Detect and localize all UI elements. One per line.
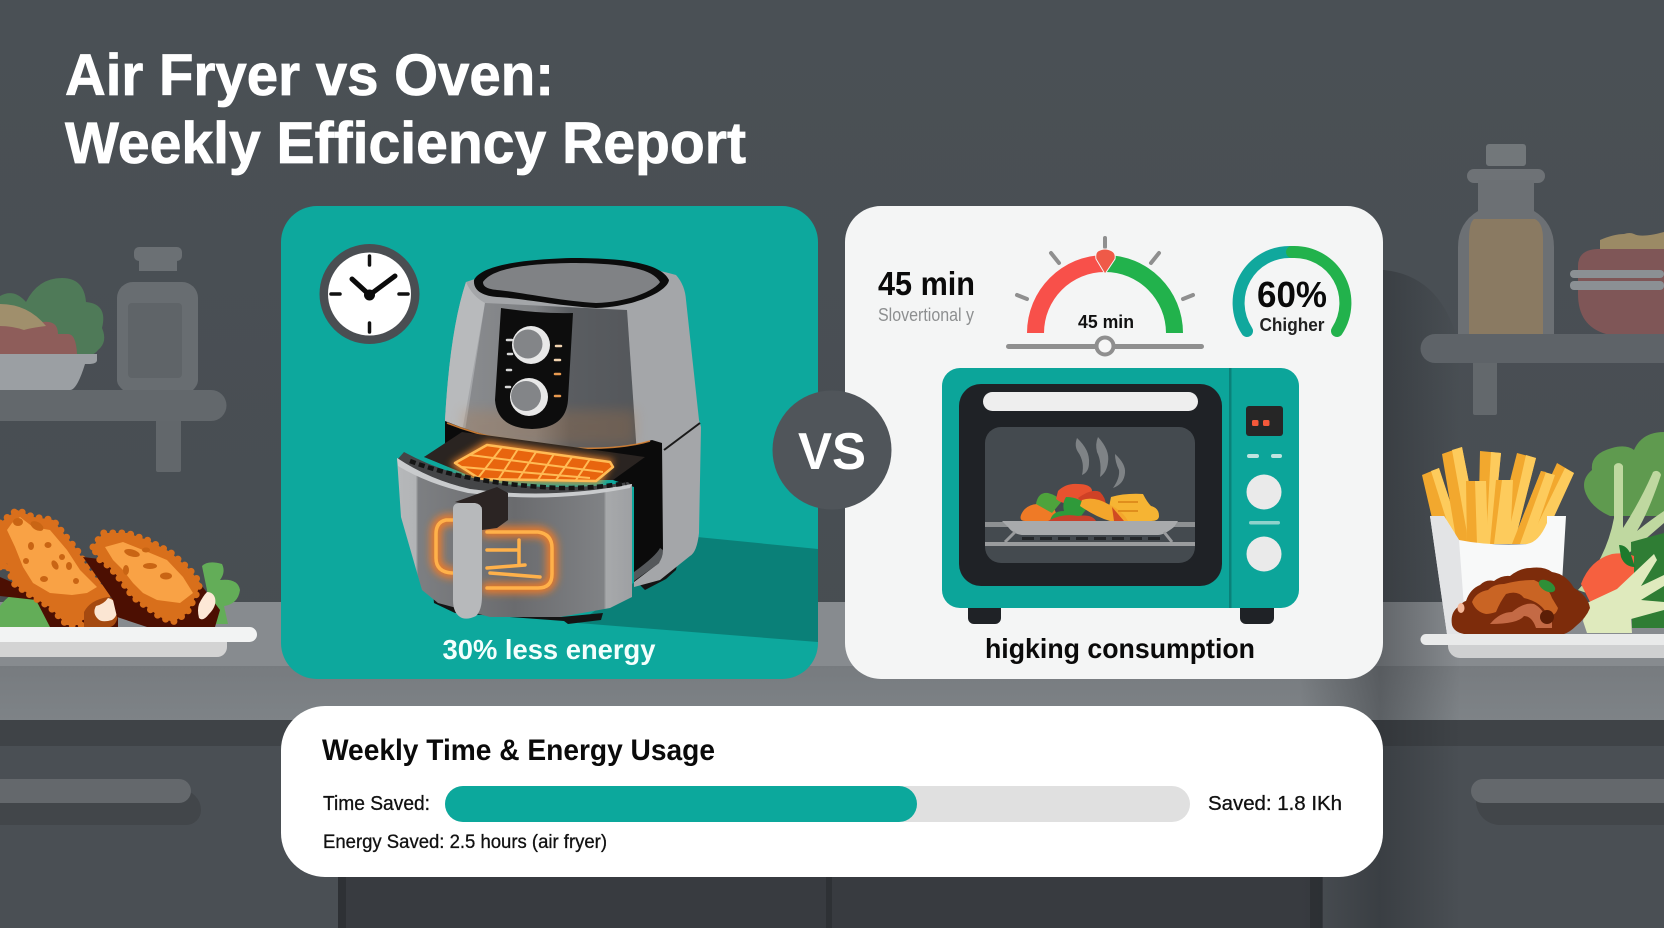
bottle xyxy=(1458,144,1554,334)
icon: oven xyxy=(942,368,1299,624)
fryer feet xyxy=(433,593,603,624)
dark greens xyxy=(1631,533,1664,628)
broccoli xyxy=(1578,432,1664,597)
basket rim holes xyxy=(410,461,626,488)
icon: clock xyxy=(320,244,420,344)
basket rim xyxy=(397,452,632,495)
glowing icon on basket xyxy=(436,520,552,588)
heading: Weekly Time & Energy Usage xyxy=(322,734,715,767)
plate xyxy=(1420,634,1664,658)
energy saved: Energy Saved: 2.5 hours (air fryer) xyxy=(323,832,607,853)
chicken piece 2 xyxy=(83,533,220,627)
right plate with fries, meat and vegetables xyxy=(1420,432,1664,658)
panel: oven xyxy=(845,206,1383,679)
title xyxy=(65,43,746,176)
rack and tray xyxy=(985,521,1195,546)
ring: 60% higher xyxy=(1239,252,1345,335)
stat: 45 min xyxy=(878,265,975,325)
glowing grid xyxy=(450,441,614,484)
title: Weekly Efficiency Report xyxy=(65,111,746,176)
left shelf with bowl and jar xyxy=(0,247,226,472)
saved value: Saved: 1.8 IKh xyxy=(1208,793,1342,815)
warm glow under body xyxy=(462,410,636,445)
tomato xyxy=(1581,545,1635,602)
meat xyxy=(1452,568,1590,634)
label: 30% less energy xyxy=(442,634,656,665)
shelf xyxy=(0,390,226,472)
time saved label: Time Saved: xyxy=(323,793,430,815)
right drawer handle xyxy=(1471,779,1664,825)
shelf xyxy=(1420,334,1664,415)
controls xyxy=(1246,454,1282,572)
french fries xyxy=(1422,447,1574,544)
leek xyxy=(1583,554,1664,633)
progress bar xyxy=(445,786,1190,822)
title: Air Fryer vs Oven: xyxy=(65,43,554,108)
panel: air fryer xyxy=(281,206,818,679)
right shelf with bottle and pot xyxy=(1420,144,1664,415)
ring: 60% higher: 60% xyxy=(1257,274,1327,315)
control panel xyxy=(495,308,573,429)
ring: 60% higher: Chigher xyxy=(1260,315,1324,335)
display xyxy=(1246,406,1283,436)
label: higking consumption xyxy=(985,633,1255,664)
plate xyxy=(0,627,257,657)
gauge: 45 min xyxy=(1078,312,1134,332)
fries box xyxy=(1430,516,1566,634)
chicken piece 1 xyxy=(0,510,118,627)
gauge xyxy=(1006,238,1204,354)
left plate with fried chicken xyxy=(0,510,257,657)
basket handle xyxy=(453,487,508,619)
stat: 45 min: 45 min xyxy=(878,265,975,302)
VS badge: VS xyxy=(798,423,866,481)
fryer body xyxy=(445,262,701,587)
panel: weekly usage xyxy=(281,706,1383,877)
steam xyxy=(1076,437,1125,488)
basket inner xyxy=(424,432,645,480)
lid xyxy=(474,258,669,308)
bowl of greens xyxy=(0,278,104,390)
icon: air fryer xyxy=(397,258,701,624)
opening xyxy=(424,421,663,582)
basket front xyxy=(397,458,632,617)
jar xyxy=(117,247,198,390)
VS badge xyxy=(772,390,892,510)
knobs xyxy=(510,326,550,416)
lettuce xyxy=(0,562,240,627)
body seam xyxy=(664,423,700,450)
shadow behind cards xyxy=(1300,270,1460,928)
food xyxy=(1020,484,1159,521)
stat: 45 min: Slovertional y xyxy=(878,305,974,325)
pot xyxy=(1570,232,1664,334)
left drawer handle xyxy=(0,779,201,825)
floor shadow xyxy=(578,537,818,642)
